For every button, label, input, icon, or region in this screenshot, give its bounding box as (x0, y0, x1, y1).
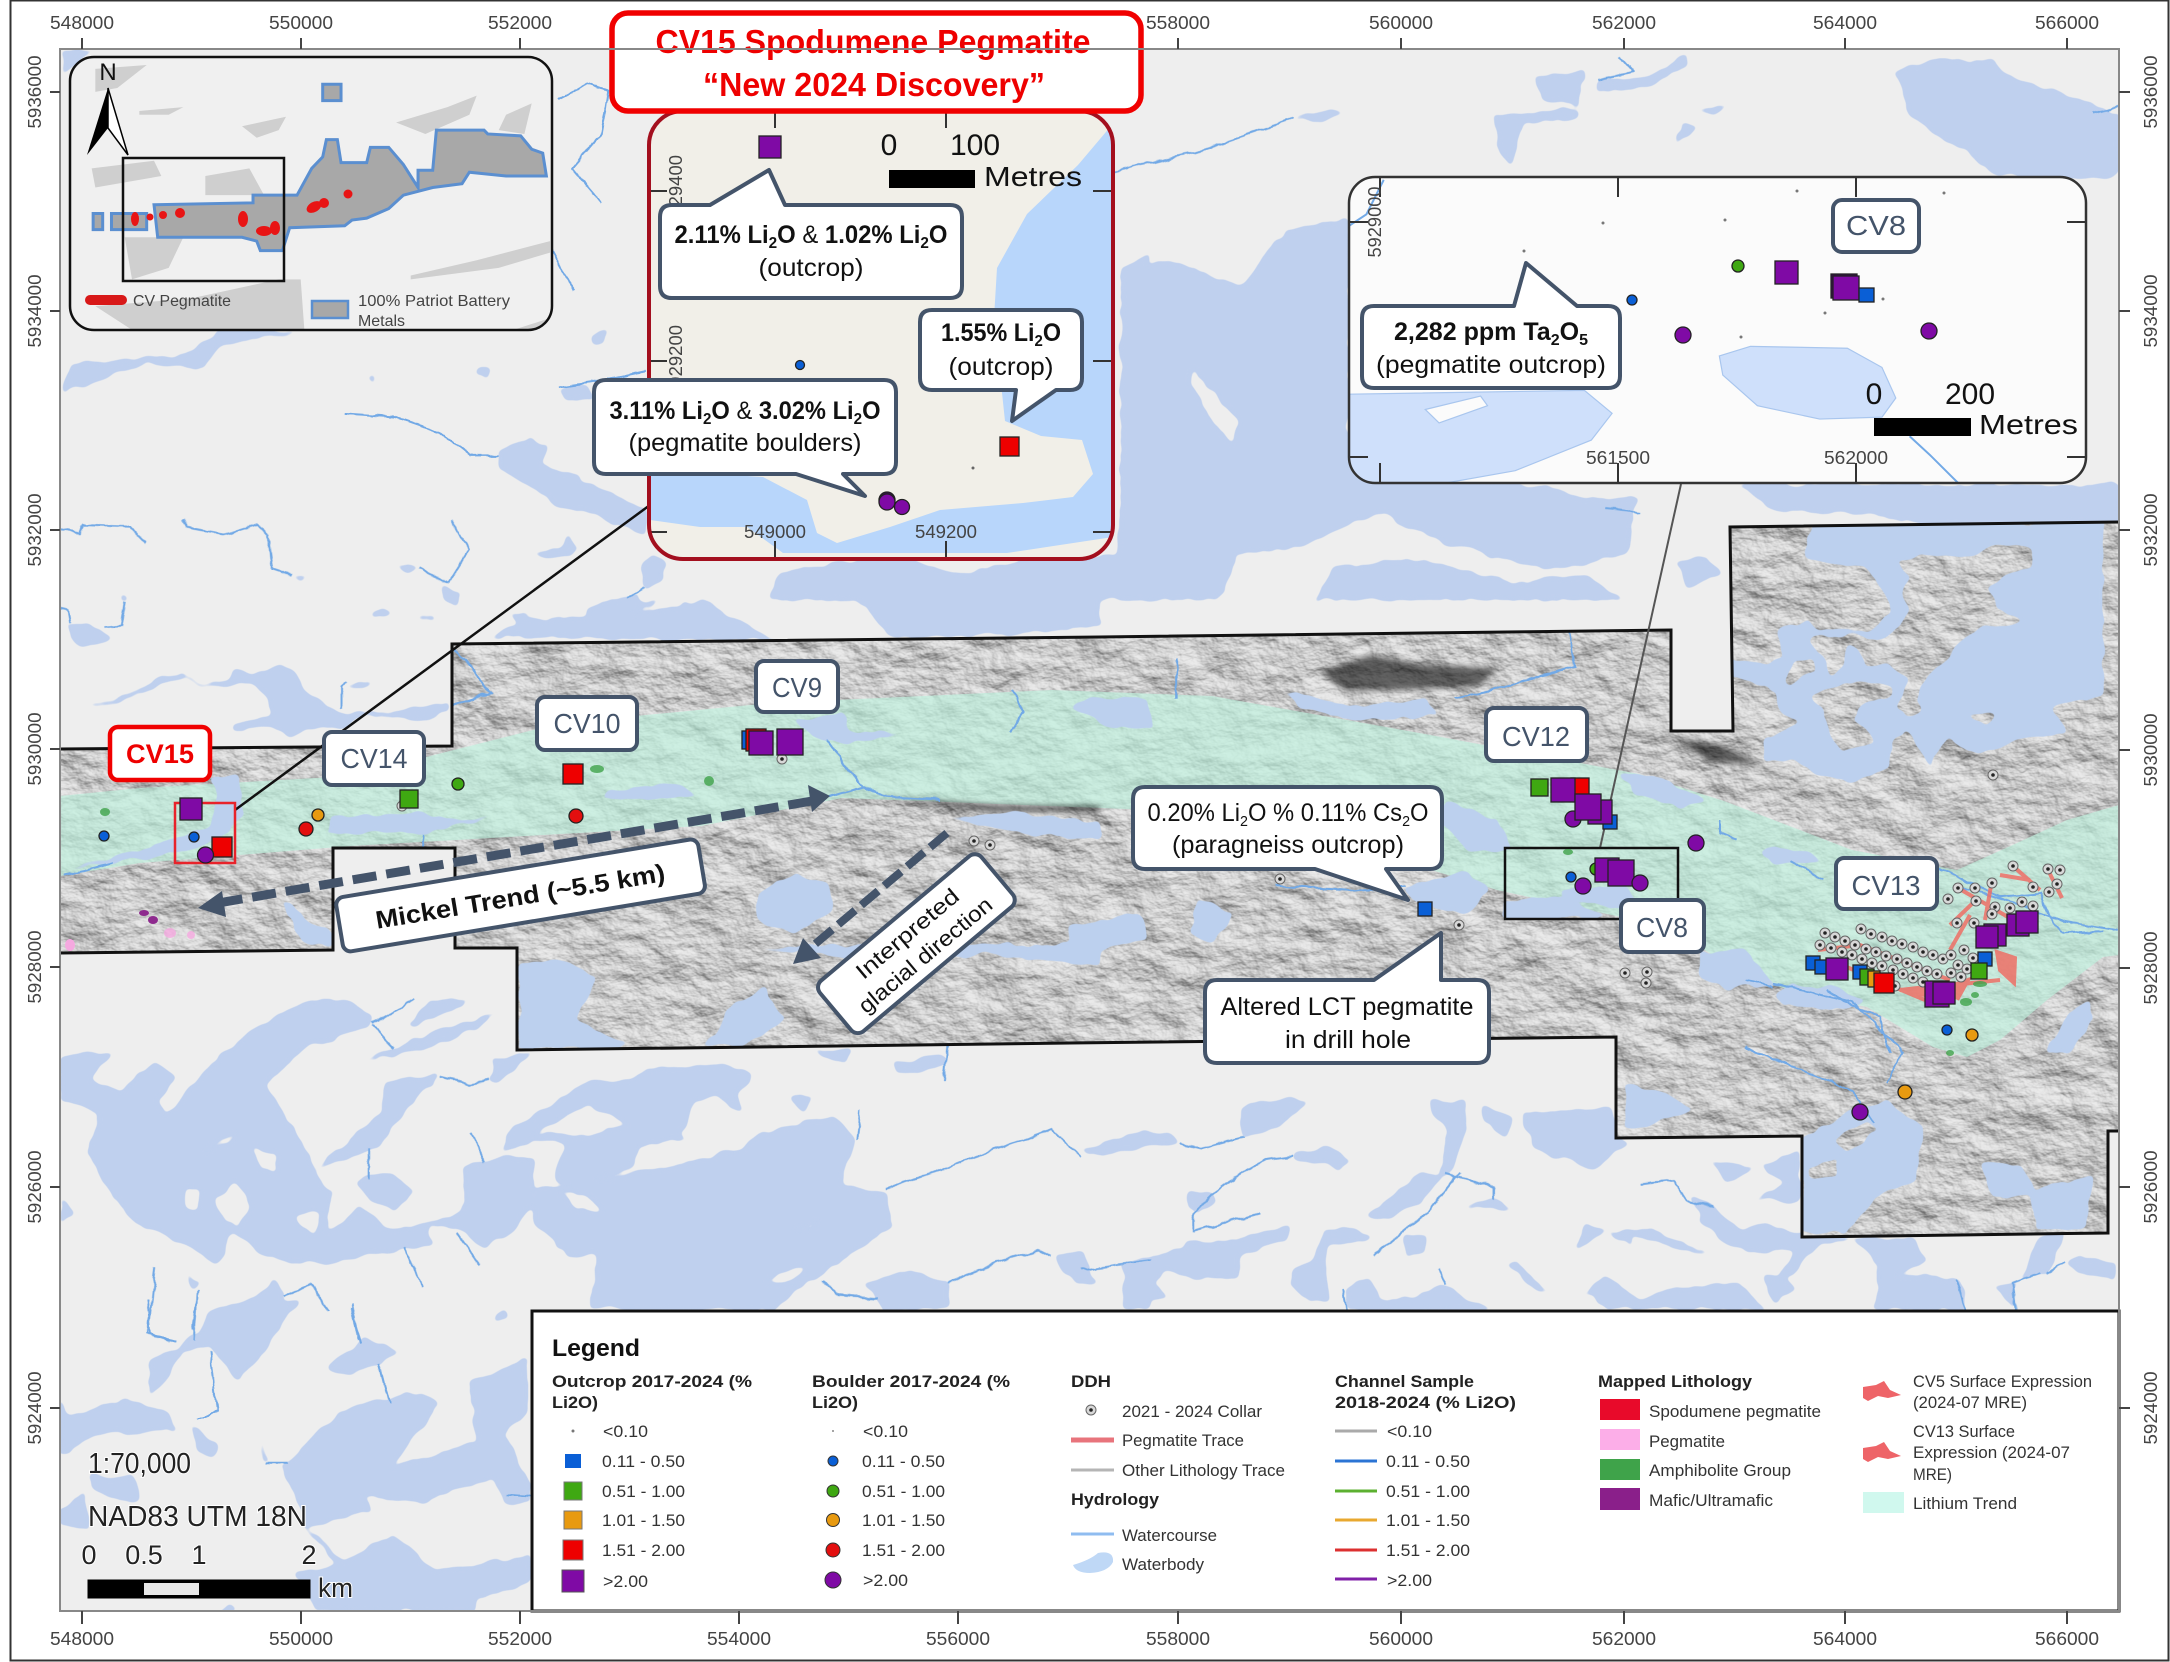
legend channel sample column: 1.01 - 1.50 (1386, 1511, 1470, 1530)
callout 3.11%: (pegmatite boulders) (628, 429, 862, 457)
locator terrain (92, 65, 552, 330)
callout 1.55%: 2 (1035, 333, 1043, 350)
callout Ta2O5 (1362, 263, 1620, 388)
legend channel sample column: 1.51 - 2.00 (1386, 1541, 1470, 1560)
callout drill hole: in drill hole (1285, 1026, 1411, 1054)
legend outcrop column: Outcrop 2017-2024 (% (552, 1372, 752, 1391)
bottom axis labels: 556000 (926, 1629, 990, 1649)
legend mapped lithology column: Mafic/Ultramafic (1649, 1491, 1773, 1510)
scale and projection block: km (318, 1573, 353, 1603)
label CV12 (1486, 708, 1587, 761)
top axis labels: 550000 (269, 13, 333, 33)
legend mapped lithology column: Spodumene pegmatite (1649, 1402, 1821, 1421)
title banner: “New 2024 Discovery” (703, 66, 1045, 103)
CV13 markers (1806, 911, 2038, 1120)
right axis labels: 5924000 (2141, 1372, 2161, 1444)
legend DDH and hydrology column: Pegmatite Trace (1122, 1431, 1244, 1450)
scale and projection block: 1 (191, 1540, 207, 1570)
legend DDH and hydrology column (1071, 1372, 1285, 1574)
legend boulder column: Boulder 2017-2024 (% (812, 1372, 1010, 1391)
legend DDH and hydrology column: 2021 - 2024 Collar (1122, 1402, 1262, 1421)
top axis labels: 560000 (1369, 13, 1433, 33)
CV15 inset coordinates: 5929200 (666, 325, 686, 397)
legend boulder column: >2.00 (863, 1571, 908, 1590)
bottom axis labels: 548000 (50, 1629, 114, 1649)
left axis labels: 5932000 (25, 494, 45, 566)
glacial direction label (814, 851, 1018, 1037)
CV14 markers (400, 778, 464, 808)
callout Ta2O5: (pegmatite outcrop) (1376, 351, 1606, 379)
right axis labels (2141, 56, 2161, 1444)
legend DDH and hydrology column: Other Lithology Trace (1122, 1461, 1285, 1480)
legend boulder column: Li2O) (812, 1393, 858, 1412)
top axis labels: 558000 (1146, 13, 1210, 33)
scale and projection block (81, 1448, 353, 1603)
callout 3.11%: 3.11% Li (610, 397, 708, 425)
callout 1.55% (920, 310, 1082, 421)
callout 2.11%: 2 (769, 235, 777, 252)
callout 2.11%: & 1.02% Li (802, 221, 925, 249)
callout 2.11%: 2.11% Li (674, 221, 773, 249)
legend boulder column: <0.10 (863, 1422, 908, 1441)
callout 1.55%: O (1043, 319, 1061, 347)
glacial direction label: glacial direction (853, 892, 997, 1018)
callout drill hole (1205, 933, 1489, 1063)
legend surface expression column: Lithium Trend (1913, 1494, 2017, 1513)
label CV10 (537, 697, 637, 750)
Mickel Trend label (335, 838, 706, 953)
leader line to CV8 inset (1600, 484, 1681, 848)
CV15 inset ticks (649, 113, 1113, 559)
callout 2.11%: 2 (920, 235, 929, 252)
label CV13: CV13 (1852, 870, 1920, 901)
callout paragneiss: (paragneiss outcrop) (1172, 831, 1404, 859)
callout 3.11%: & 3.02% Li (736, 397, 859, 425)
label CV9: CV9 (772, 672, 822, 703)
top axis labels (50, 13, 2099, 33)
CV8 inset coordinates: 5929000 (1365, 186, 1385, 258)
callout paragneiss: O % 0.11% Cs (1248, 799, 1402, 827)
legend DDH and hydrology column: Watercourse (1122, 1526, 1217, 1545)
bottom axis labels: 554000 (707, 1629, 771, 1649)
label CV12: CV12 (1502, 721, 1570, 752)
legend channel sample column: 2018-2024 (% Li2O) (1335, 1393, 1516, 1412)
legend outcrop column: 1.51 - 2.00 (602, 1541, 685, 1560)
callout Ta2O5: 2 (1551, 332, 1560, 349)
label CV14: CV14 (340, 743, 408, 774)
legend boulder column (812, 1372, 1010, 1590)
callout paragneiss: 2 (1402, 813, 1410, 830)
label CV15 (110, 727, 210, 780)
title banner (612, 13, 1141, 111)
locator legend: CV Pegmatite (133, 293, 231, 310)
callout 3.11%: O (711, 397, 736, 425)
CV15 inset lakes (649, 126, 1113, 553)
label CV9 (756, 661, 838, 712)
label CV8 inset (1833, 200, 1919, 252)
legend outcrop column: >2.00 (603, 1572, 648, 1591)
CV15 inset coordinates (666, 155, 977, 542)
CV15 inset scale bar: 0 (881, 129, 897, 162)
legend boulder column: 1.01 - 1.50 (862, 1511, 945, 1530)
callout 3.11%: 2 (854, 411, 862, 428)
label CV8 inset: CV8 (1846, 210, 1906, 241)
top axis labels: 562000 (1592, 13, 1656, 33)
locator legend: 100% Patriot Battery (358, 293, 510, 310)
left axis labels: 5930000 (25, 712, 45, 786)
legend surface expression column: CV5 Surface Expression (1913, 1372, 2092, 1391)
CV8 markers (1566, 858, 1648, 894)
claim boundary (60, 522, 2119, 1237)
CV8 inset (1349, 177, 2086, 483)
legend boulder column: 0.11 - 0.50 (862, 1452, 945, 1471)
title banner: CV15 Spodumene Pegmatite (656, 23, 1090, 60)
CV8 inset ticks (1349, 177, 2086, 483)
scale and projection block: 1:70,000 (88, 1448, 191, 1480)
legend channel sample column (1335, 1372, 1516, 1590)
callout paragneiss: O (1410, 799, 1428, 827)
legend surface expression column: (2024-07 MRE) (1913, 1393, 2027, 1412)
legend mapped lithology column (1598, 1372, 1821, 1510)
legend outcrop column: 0.11 - 0.50 (602, 1452, 685, 1471)
bottom axis labels (50, 1629, 2099, 1649)
left axis labels (25, 56, 45, 1444)
legend channel sample column: <0.10 (1387, 1422, 1432, 1441)
legend outcrop column: Li2O) (552, 1393, 598, 1412)
right axis labels: 5930000 (2141, 714, 2161, 786)
legend channel sample column: 0.51 - 1.00 (1386, 1482, 1470, 1501)
bottom axis labels: 558000 (1146, 1629, 1210, 1649)
CV8 inset coordinates (1365, 186, 1888, 468)
bottom axis labels: 566000 (2035, 1629, 2099, 1649)
top axis labels: 564000 (1813, 13, 1877, 33)
label CV8 (1621, 900, 1704, 952)
scale and projection block: NAD83 UTM 18N (88, 1501, 307, 1533)
legend surface expression column: CV13 Surface (1913, 1422, 2015, 1441)
label CV15: CV15 (126, 739, 194, 769)
scale and projection block: 2 (301, 1540, 317, 1570)
right axis labels: 5932000 (2141, 494, 2161, 566)
hillshade claim area (60, 520, 2120, 1240)
lithium trend band (60, 690, 2119, 1057)
mafic and pegmatite blobs (65, 910, 195, 951)
callout paragneiss (1133, 787, 1442, 900)
bottom axis labels: 550000 (269, 1629, 333, 1649)
water inside claim (63, 522, 2117, 1234)
right axis labels: 5928000 (2141, 932, 2161, 1004)
callout 2.11%: O (777, 221, 802, 249)
CV15 inset scale bar (881, 129, 1082, 192)
CV8 inset markers (1627, 260, 1937, 343)
left axis labels: 5926000 (25, 1150, 45, 1224)
CV8 inset coordinates: 562000 (1824, 448, 1888, 468)
legend channel sample column: 0.11 - 0.50 (1386, 1452, 1470, 1471)
label CV13 (1836, 858, 1937, 909)
CV15 markers (99, 798, 324, 863)
locator claim shape (93, 84, 546, 251)
locator inset (70, 57, 552, 330)
legend outcrop column: 1.01 - 1.50 (602, 1511, 685, 1530)
CV15 inset scale bar: Metres (984, 161, 1082, 192)
scale and projection block: 0.5 (125, 1540, 163, 1570)
legend surface expression column (1863, 1372, 2092, 1513)
callout Ta2O5: O (1560, 318, 1579, 346)
CV10 markers (563, 764, 583, 823)
sample markers (99, 729, 2038, 1120)
legend DDH and hydrology column: Waterbody (1122, 1555, 1204, 1574)
CV13 drill collars (1815, 861, 2065, 991)
legend surface expression column: Expression (2024-07 (1913, 1443, 2070, 1462)
callout 2.11%: (outcrop) (758, 254, 864, 282)
CV15 inset markers (759, 136, 1019, 514)
left axis labels: 5936000 (25, 56, 45, 128)
Mickel Trend label: Mickel Trend (~5.5 km) (374, 859, 667, 935)
CV8 inset lakes (1349, 180, 1958, 483)
legend channel sample column: Channel Sample (1335, 1372, 1474, 1391)
glacial direction label: Interpreted (851, 883, 964, 984)
bottom axis labels: 552000 (488, 1629, 552, 1649)
Mickel Trend dashed arrow (198, 785, 830, 917)
CV8 inset scale bar: 0 (1866, 378, 1882, 411)
legend mapped lithology column: Mapped Lithology (1598, 1372, 1753, 1391)
legend outcrop column: <0.10 (603, 1422, 648, 1441)
scale and projection block: 0 (81, 1540, 97, 1570)
top axis labels: 548000 (50, 13, 114, 33)
legend mapped lithology column: Pegmatite (1649, 1432, 1725, 1451)
callout 1.55%: 1.55% Li (941, 319, 1041, 347)
label CV14 (324, 732, 424, 785)
callout drill hole: Altered LCT pegmatite (1220, 993, 1474, 1021)
legend outcrop column: 0.51 - 1.00 (602, 1482, 685, 1501)
callout 3.11%: O (862, 397, 880, 425)
CV15 inset (594, 111, 1113, 559)
CV9 markers (742, 729, 803, 755)
CV13 pegmatite traces (1818, 866, 2062, 1000)
callout 1.55%: (outcrop) (948, 353, 1054, 381)
legend surface expression column: MRE) (1913, 1465, 1952, 1484)
north arrow (87, 59, 128, 155)
CV15 inset coordinates: 549000 (744, 522, 806, 542)
left axis labels: 5924000 (25, 1372, 45, 1444)
locator legend (85, 293, 510, 330)
legend channel sample column: >2.00 (1387, 1571, 1432, 1590)
right axis labels: 5936000 (2141, 56, 2161, 128)
top axis labels: 566000 (2035, 13, 2099, 33)
callout paragneiss: 2 (1240, 813, 1248, 830)
CV8 outline box (1505, 848, 1678, 919)
legend panel (532, 1311, 2119, 1611)
label CV8: CV8 (1636, 912, 1688, 943)
CV8 inset scale bar: Metres (1979, 409, 2078, 440)
bottom axis labels: 560000 (1369, 1629, 1433, 1649)
leader line to CV15 inset (235, 505, 650, 810)
CV8 inset scale bar: 200 (1945, 378, 1995, 411)
CV8 inset scale bar (1866, 378, 2078, 440)
legend outcrop column (552, 1372, 752, 1592)
callout 3.11% (594, 380, 896, 496)
north arrow: N (99, 59, 117, 86)
legend boulder column: 0.51 - 1.00 (862, 1482, 945, 1501)
legend DDH and hydrology column: Hydrology (1071, 1490, 1160, 1509)
callout 2.11%: O (929, 221, 948, 249)
right axis labels: 5926000 (2141, 1150, 2161, 1224)
CV15 outline box (175, 803, 235, 863)
CV12 markers (1531, 778, 1704, 851)
callout 2.11% (660, 170, 962, 298)
locator red pegmatite dots (131, 190, 352, 236)
top axis labels: 552000 (488, 13, 552, 33)
isolated outcrop marker (1418, 902, 1432, 916)
drill collars (397, 754, 1998, 988)
legend mapped lithology column: Amphibolite Group (1649, 1461, 1791, 1480)
CV15 inset coordinates: 5929400 (666, 155, 686, 227)
callout 3.11%: 2 (703, 411, 712, 428)
legend heading: Legend (552, 1335, 640, 1362)
CV15 inset scale bar: 100 (950, 129, 1000, 162)
glacial direction dashed arrow (793, 833, 947, 964)
lithology blobs (100, 765, 1987, 1056)
CV8 inset coordinates: 561500 (1586, 448, 1650, 468)
CV15 inset coordinates: 549200 (915, 522, 977, 542)
label CV10: CV10 (554, 708, 620, 739)
callout Ta2O5: 5 (1579, 332, 1588, 349)
legend boulder column: 1.51 - 2.00 (862, 1541, 945, 1560)
bottom axis labels: 564000 (1813, 1629, 1877, 1649)
right axis labels: 5934000 (2141, 274, 2161, 348)
left axis labels: 5928000 (25, 930, 45, 1004)
callout paragneiss: 0.20% Li (1148, 799, 1245, 827)
legend DDH and hydrology column: DDH (1071, 1372, 1111, 1391)
bottom axis labels: 562000 (1592, 1629, 1656, 1649)
left axis labels: 5934000 (25, 274, 45, 348)
ridge shadows (880, 655, 1762, 812)
locator legend: Metals (358, 313, 405, 330)
callout Ta2O5: 2,282 ppm Ta (1394, 318, 1551, 346)
